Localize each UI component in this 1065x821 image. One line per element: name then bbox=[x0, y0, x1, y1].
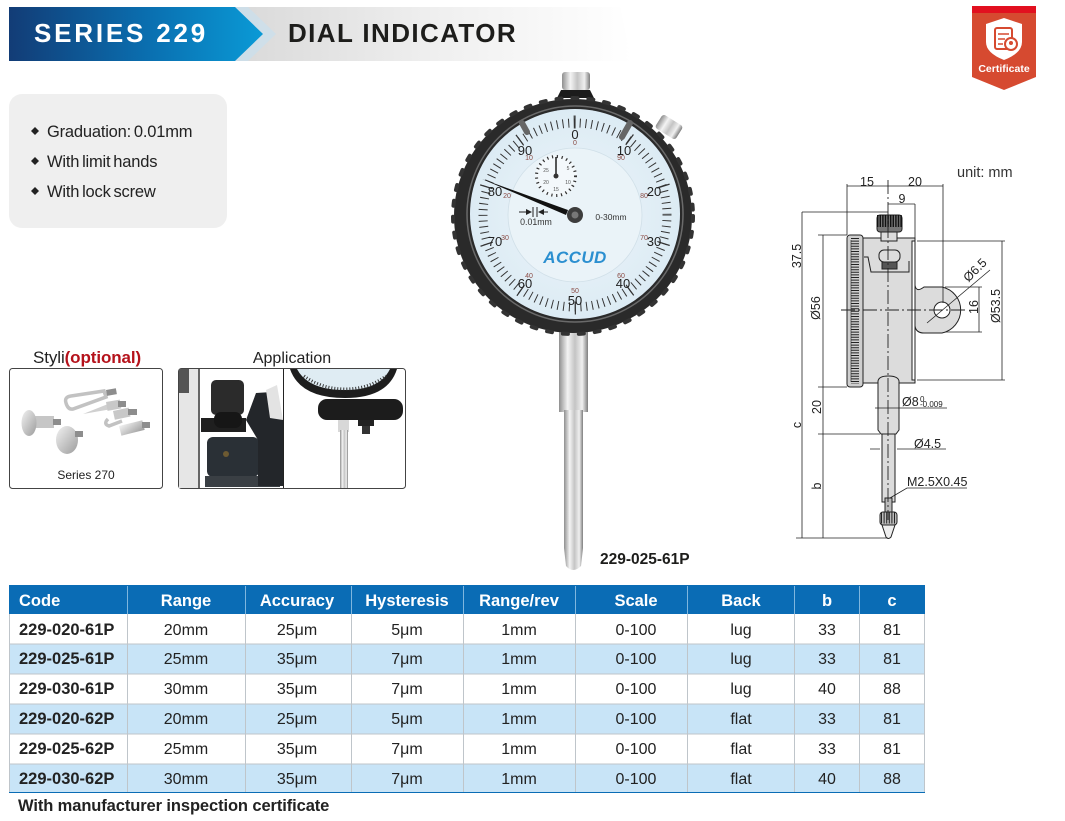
table row 6: 35μm bbox=[277, 771, 317, 788]
technical drawing bbox=[790, 175, 1005, 538]
table header bbox=[19, 592, 897, 610]
table row 5: 33 bbox=[818, 741, 836, 758]
lock screw bbox=[864, 257, 909, 272]
table row 4: flat bbox=[730, 711, 752, 728]
table row 1: 20mm bbox=[164, 622, 208, 639]
table row 5: 35μm bbox=[277, 741, 317, 758]
table row 6: 7μm bbox=[391, 771, 423, 788]
table row 6: 0-100 bbox=[616, 771, 657, 788]
reverse scale numbers: 80 bbox=[640, 193, 648, 200]
sub dial: 10 bbox=[565, 180, 571, 186]
reverse scale numbers: 30 bbox=[501, 235, 509, 242]
specification table bbox=[9, 585, 925, 793]
table row 1: 25μm bbox=[277, 622, 317, 639]
table row 1: 5μm bbox=[391, 622, 423, 639]
main scale numbers: 40 bbox=[616, 276, 630, 291]
main scale numbers: 30 bbox=[647, 234, 661, 249]
certificate badge: Certificate bbox=[978, 63, 1030, 75]
table row 5: 25mm bbox=[164, 741, 208, 758]
table header: Back bbox=[721, 592, 762, 610]
table row 3: lug bbox=[730, 681, 752, 698]
graduation ticks bbox=[482, 122, 668, 308]
title band: dial indicator: DIAL INDICATOR bbox=[288, 18, 517, 48]
table row 4: 5μm bbox=[391, 711, 423, 728]
dimension labels: M2.5X0.45 bbox=[907, 475, 968, 489]
table row 5: 1mm bbox=[501, 741, 537, 758]
drawing: body bbox=[847, 215, 961, 538]
top knob bbox=[881, 232, 897, 241]
table header: Code bbox=[19, 592, 60, 610]
table row 1: 33 bbox=[818, 622, 836, 639]
table row 4: 20mm bbox=[164, 711, 208, 728]
sub dial bbox=[535, 155, 577, 197]
photo: clamp detail bbox=[179, 369, 283, 488]
table row 2: 81 bbox=[883, 651, 901, 668]
table row 6: 40 bbox=[818, 771, 836, 788]
main scale numbers: 0 bbox=[571, 127, 579, 142]
table row 1: lug bbox=[730, 622, 752, 639]
table row 3: 30mm bbox=[164, 681, 208, 698]
footnote: With manufacturer inspection certificate bbox=[18, 797, 329, 815]
table row 2: 7μm bbox=[391, 651, 423, 668]
dimension lines bbox=[796, 184, 1005, 538]
table row 2: lug bbox=[730, 651, 752, 668]
dimension labels: Ø56 bbox=[809, 296, 823, 320]
dimension labels: -0.009 bbox=[920, 400, 943, 409]
table row 2 bbox=[19, 650, 901, 668]
table row 6: 229-030-62P bbox=[19, 770, 114, 788]
table row 4: 0-100 bbox=[616, 711, 657, 728]
table row 1 bbox=[19, 621, 901, 639]
title band: dial indicator bbox=[235, 7, 632, 61]
reverse scale numbers: 10 bbox=[525, 155, 533, 162]
icon: stylus flat tip bbox=[22, 410, 61, 436]
feature: limit hands: With limit hands bbox=[47, 153, 157, 171]
dimension labels: Ø6.5 bbox=[961, 256, 990, 285]
range label: 0-30mm bbox=[595, 212, 627, 222]
knob: side lock bbox=[655, 114, 683, 140]
table row 3: 1mm bbox=[501, 681, 537, 698]
table row 2: 229-025-61P bbox=[19, 650, 114, 668]
photo: indicator on lug back bbox=[290, 369, 403, 488]
dimension labels: 16 bbox=[967, 300, 981, 314]
heading: application: Application bbox=[253, 350, 331, 367]
dimension labels: b bbox=[810, 482, 824, 489]
dimension labels: 20 bbox=[810, 400, 824, 414]
divider bbox=[283, 369, 284, 488]
main scale numbers bbox=[488, 127, 661, 308]
table rows bbox=[9, 585, 925, 793]
pivot bbox=[567, 207, 583, 223]
unit note: unit: mm bbox=[957, 165, 1013, 181]
reverse scale numbers: 40 bbox=[525, 273, 533, 280]
table row 4: 229-020-62P bbox=[19, 710, 114, 728]
table row 4: 81 bbox=[883, 711, 901, 728]
table row 4: 33 bbox=[818, 711, 836, 728]
sub dial: 5 bbox=[567, 166, 570, 172]
sub dial: 25 bbox=[543, 168, 549, 174]
reverse scale numbers: 0 bbox=[573, 140, 577, 147]
heading: styli: Styli(optional) bbox=[33, 348, 141, 367]
dial face bbox=[470, 109, 680, 319]
limit hand stops bbox=[522, 123, 630, 137]
table row 2: 1mm bbox=[501, 651, 537, 668]
dimension labels bbox=[790, 175, 1003, 489]
table row 2: 35μm bbox=[277, 651, 317, 668]
main scale numbers: 90 bbox=[518, 143, 532, 158]
dial indicator photo bbox=[453, 72, 693, 570]
caption: series 270: Series 270 bbox=[57, 468, 115, 482]
dimension labels: 15 bbox=[860, 175, 874, 189]
sub dial: 15 bbox=[553, 187, 559, 193]
brand logo: ACCUD bbox=[542, 248, 607, 267]
stem and spindle bbox=[559, 330, 588, 570]
table row 3: 88 bbox=[883, 681, 901, 698]
dimension labels: 0 bbox=[920, 395, 925, 404]
table row 6: 30mm bbox=[164, 771, 208, 788]
main scale numbers: 50 bbox=[568, 293, 582, 308]
dimension labels: c bbox=[790, 422, 804, 428]
main scale numbers: 10 bbox=[617, 143, 631, 158]
feature: graduation: Graduation: 0.01mm bbox=[47, 123, 192, 141]
panel: application photos bbox=[178, 368, 406, 488]
bezel bbox=[453, 98, 693, 334]
table row 3: 40 bbox=[818, 681, 836, 698]
reverse scale numbers: 20 bbox=[503, 193, 511, 200]
reverse scale numbers: 70 bbox=[640, 235, 648, 242]
table row 3: 35μm bbox=[277, 681, 317, 698]
dimension labels: Ø8 bbox=[902, 395, 919, 409]
feature: lock screw: With lock screw bbox=[47, 183, 156, 201]
dimension labels: Ø4.5 bbox=[914, 437, 941, 451]
table row 6 bbox=[19, 770, 901, 788]
knob: top bbox=[557, 72, 594, 98]
table row 6: flat bbox=[730, 771, 752, 788]
reverse scale numbers: 50 bbox=[571, 288, 579, 295]
table row 5: 229-025-62P bbox=[19, 740, 114, 758]
needle bbox=[482, 179, 568, 215]
dimension labels: 37.5 bbox=[790, 244, 804, 268]
sub dial: 20 bbox=[543, 180, 549, 186]
table row 2: 33 bbox=[818, 651, 836, 668]
icon: stylus round tip bbox=[56, 426, 83, 454]
centre lines bbox=[841, 180, 968, 520]
table row 1: 229-020-61P bbox=[19, 621, 114, 639]
table row 2: 25mm bbox=[164, 651, 208, 668]
dimension labels: 9 bbox=[899, 192, 906, 206]
main scale numbers: 70 bbox=[488, 234, 502, 249]
series tag bbox=[9, 7, 263, 61]
table header: c bbox=[887, 592, 897, 610]
table row 3: 7μm bbox=[391, 681, 423, 698]
table row 5: 81 bbox=[883, 741, 901, 758]
header banner bbox=[9, 7, 632, 61]
table row 4: 1mm bbox=[501, 711, 537, 728]
table row 5: 7μm bbox=[391, 741, 423, 758]
panel: styli accessories bbox=[10, 368, 162, 488]
main scale numbers: 80 bbox=[488, 184, 502, 199]
reverse scale numbers: 60 bbox=[617, 273, 625, 280]
table header: Scale bbox=[614, 592, 658, 610]
grid lines bbox=[9, 586, 925, 793]
dimension labels: Ø53.5 bbox=[989, 289, 1003, 323]
table row 6: 1mm bbox=[501, 771, 537, 788]
table row 1: 1mm bbox=[501, 622, 537, 639]
table row 3: 0-100 bbox=[616, 681, 657, 698]
table row 1: 81 bbox=[883, 622, 901, 639]
table row 5 bbox=[19, 740, 901, 758]
model label: 229-025-61P bbox=[600, 551, 690, 568]
table header: b bbox=[822, 592, 832, 610]
table row 6: 88 bbox=[883, 771, 901, 788]
table header: Range/rev bbox=[479, 592, 560, 610]
table row 1: 0-100 bbox=[616, 622, 657, 639]
main scale numbers: 20 bbox=[647, 184, 661, 199]
table row 3: 229-030-61P bbox=[19, 680, 114, 698]
table row 4 bbox=[19, 710, 901, 728]
table row 5: 0-100 bbox=[616, 741, 657, 758]
table header: Range bbox=[161, 592, 211, 610]
panel: features bbox=[9, 94, 227, 228]
certificate badge bbox=[972, 6, 1036, 90]
table header: Accuracy bbox=[260, 592, 335, 610]
table row 5: flat bbox=[730, 741, 752, 758]
table row 3 bbox=[19, 680, 901, 698]
table header: Hysteresis bbox=[365, 592, 449, 610]
resolution mark bbox=[519, 207, 552, 227]
reverse scale numbers bbox=[501, 140, 648, 295]
dimension labels: 20 bbox=[908, 175, 922, 189]
icon: stylus needle and looped tips bbox=[66, 388, 150, 436]
resolution mark: 0.01mm bbox=[520, 217, 552, 227]
series tag: SERIES 229 bbox=[34, 18, 208, 48]
table row 2: 0-100 bbox=[616, 651, 657, 668]
table row 4: 25μm bbox=[277, 711, 317, 728]
reverse scale numbers: 90 bbox=[617, 155, 625, 162]
main scale numbers: 60 bbox=[518, 276, 532, 291]
